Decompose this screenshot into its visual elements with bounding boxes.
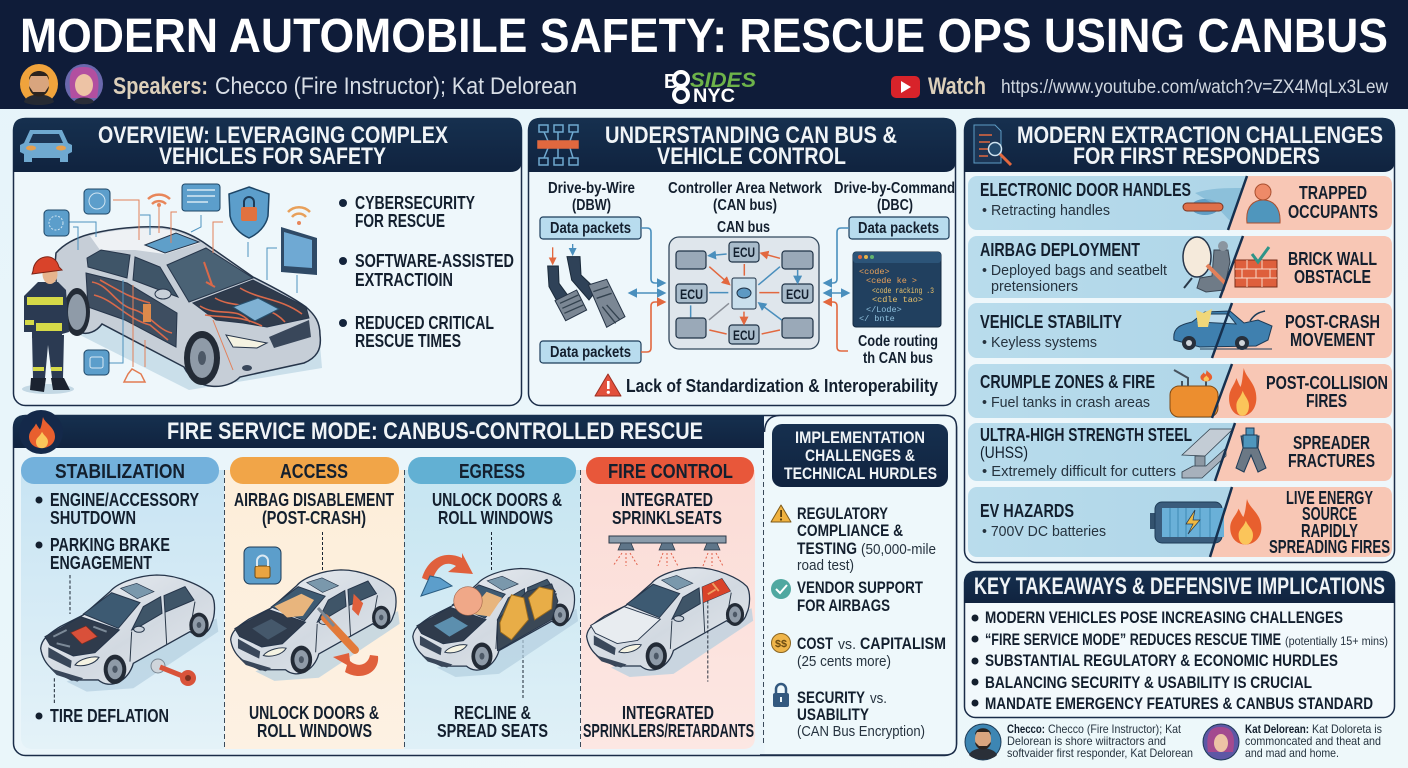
row: EV hazards (968, 487, 1392, 557)
callout: standardization: Lack of Standardization & Interoperability (626, 376, 938, 396)
column: access: AIRBAG DISABLEMENT (234, 490, 394, 510)
column: stabilization (21, 457, 224, 749)
icon: tire deflation wrench (151, 659, 196, 686)
data packets boxes: Data packets (550, 220, 631, 237)
panel: implementation challenges (760, 416, 956, 755)
row: EV hazards: RAPIDLY (1301, 521, 1358, 541)
icon: coin (772, 634, 790, 652)
speaker bio: Checco: Delorean is shore wiitractors and (1007, 734, 1166, 748)
row: airbag deployment: BRICK WALL (1288, 249, 1377, 269)
connector arrows (630, 228, 849, 352)
item: security (797, 688, 925, 740)
icon: warning triangle (595, 374, 621, 396)
item: vendor support: VENDOR SUPPORT (797, 578, 923, 597)
icon: fuel tank (1170, 370, 1218, 417)
icon: spreader tool (1236, 428, 1266, 472)
row: EV hazards: EV HAZARDS (980, 501, 1074, 521)
code window: </ bnte (859, 314, 895, 324)
item: cost: CAPITALISM (860, 634, 946, 653)
icon: warning (771, 505, 791, 522)
column: egress: RECLINE & (454, 703, 531, 723)
item: security: SECURITY (797, 688, 866, 707)
illustration: connected car (55, 227, 322, 390)
row: airbag deployment: pretensioners (991, 278, 1078, 295)
speakers line: Checco (Fire Instructor); Kat Delorean (215, 73, 577, 100)
speaker bio: Kat: commoncated and theat and (1245, 734, 1381, 748)
row: EV hazards: LIVE ENERGY (1286, 488, 1373, 508)
speaker bio: Kat: and mad and home. (1245, 746, 1339, 760)
dashed dividers (224, 450, 764, 748)
icon: flame badge (19, 410, 63, 454)
item: regulatory compliance: REGULATORY (797, 504, 889, 523)
column: fire control: FIRE CONTROL (608, 461, 733, 483)
column: access: UNLOCK DOORS & (249, 703, 379, 723)
icon: fire (1229, 368, 1256, 416)
icon: door handle (1183, 188, 1243, 222)
item: cost: vs. (838, 636, 856, 653)
bullets: overview points: SOFTWARE-ASSISTED (355, 251, 514, 271)
icon: steel beam (1182, 429, 1233, 478)
icon: pry tool and arrow (318, 608, 378, 676)
item: vendor support (797, 578, 923, 615)
icon: battery (1150, 502, 1224, 543)
row: ultra-high strength steel: (UHSS) (980, 443, 1028, 462)
row: electronic door handles: OCCUPANTS (1288, 202, 1378, 222)
column titles: (CAN bus) (713, 197, 777, 214)
panel: extraction challenges (964, 118, 1395, 562)
heading: implementation (784, 428, 937, 483)
heading: CAN bus: VEHICLE CONTROL (657, 143, 846, 170)
icon: fire (1230, 499, 1261, 545)
bullets: takeaways: BALANCING SECURITY & USABILITY IS CRUCIAL (985, 673, 1312, 692)
illustration: car with engine bay (41, 575, 218, 703)
column: stabilization: ENGINE/ACCESSORY (50, 490, 199, 510)
bullets: takeaways: “FIRE SERVICE MODE” REDUCES RESCUE TIME (985, 630, 1281, 649)
column: stabilization: ENGAGEMENT (50, 553, 152, 573)
CAN bus network diagram (669, 237, 819, 349)
bullets: takeaways (972, 608, 1388, 713)
column: access (225, 457, 404, 749)
row: electronic door handles (968, 176, 1392, 230)
column: fire control: INTEGRATED (621, 490, 713, 510)
CAN bus network diagram: ECU (786, 286, 809, 302)
column: fire control (581, 457, 755, 749)
column titles: Drive-by-Command (834, 180, 955, 197)
panel: CAN bus (528, 118, 956, 406)
item: cost: (25 cents more) (797, 653, 891, 670)
bullets: overview points: RESCUE TIMES (355, 331, 461, 351)
column: stabilization: TIRE DEFLATION (50, 706, 169, 726)
column titles: (DBC) (877, 197, 913, 214)
icon: car front (20, 130, 72, 162)
row: vehicle stability: POST-CRASH (1285, 312, 1380, 332)
row: ultra-high strength steel: FRACTURES (1288, 451, 1375, 471)
column: egress: EGRESS (459, 461, 525, 483)
heading: implementation: TECHNICAL HURDLES (784, 464, 937, 483)
icon: lock (773, 684, 789, 707)
column: fire control: INTEGRATED (622, 703, 714, 723)
watch label: Watch (928, 73, 986, 100)
bullets: overview points: EXTRACTIOIN (355, 270, 453, 290)
speakers line: Speakers: (113, 73, 208, 100)
speaker bio: Kat (1203, 722, 1382, 760)
code routing caption: Code routing (858, 333, 938, 350)
bullets: overview points: REDUCED CRITICAL (355, 313, 494, 333)
icon: crashed car (1174, 309, 1272, 350)
column titles: CAN bus (717, 219, 770, 236)
item: regulatory compliance: COMPLIANCE & (797, 521, 903, 540)
item: regulatory compliance: (50,000-mile (861, 541, 936, 558)
column: egress: ROLL WINDOWS (438, 508, 553, 528)
speaker bio: Checco (965, 722, 1193, 760)
row: electronic door handles: TRAPPED (1299, 183, 1367, 203)
item: security: vs. (870, 690, 887, 707)
item: security: USABILITY (797, 705, 870, 724)
column: access: ROLL WINDOWS (257, 721, 372, 741)
speaker avatar: Checco (20, 64, 58, 105)
heading: extraction: FOR FIRST RESPONDERS (1073, 143, 1320, 170)
logo: BSides NYC (664, 69, 756, 107)
item: cost: COST (797, 634, 833, 653)
speaker avatar: Kat (65, 64, 103, 104)
row: vehicle stability: MOVEMENT (1290, 330, 1375, 350)
heading: overview: VEHICLES FOR SAFETY (159, 143, 386, 170)
code window: <code> (859, 267, 890, 277)
logo: BSides NYC: B (664, 71, 678, 93)
column: stabilization: SHUTDOWN (50, 508, 136, 528)
column titles (548, 180, 955, 236)
icon group: connected systems (44, 184, 317, 382)
item: regulatory compliance: road test) (797, 557, 854, 574)
row: ultra-high strength steel: SPREADER (1293, 433, 1370, 453)
item: security: (CAN Bus Encryption) (797, 723, 925, 740)
panel: overview (13, 118, 522, 406)
code routing caption (858, 333, 938, 367)
row: crumple zones and fire: • Fuel tanks in crash areas (982, 394, 1150, 411)
panel: key takeaways (964, 571, 1395, 718)
row: airbag deployment: OBSTACLE (1294, 267, 1371, 287)
illustration: firefighter (22, 257, 74, 394)
icon: check (771, 579, 791, 599)
bullets: overview points (339, 193, 514, 351)
row: vehicle stability (968, 303, 1392, 358)
data packets boxes (540, 217, 949, 363)
column: fire control: SPRINKLSEATS (612, 508, 722, 528)
row: airbag deployment: • Deployed bags and seatbelt (982, 262, 1168, 279)
row: electronic door handles: • Retracting handles (982, 202, 1110, 219)
icon: checklist magnifier (974, 125, 1011, 165)
data packets boxes: Data packets (858, 220, 939, 237)
bullets: overview points: CYBERSECURITY (355, 193, 475, 213)
item: regulatory compliance: TESTING (797, 539, 857, 558)
logo: BSides NYC: NYC (693, 86, 735, 107)
column: egress: UNLOCK DOORS & (432, 490, 562, 510)
heading: overview (98, 122, 448, 170)
illustration: car with airbag (231, 570, 400, 681)
item: cost (797, 634, 946, 670)
item: vendor support: FOR AIRBAGS (797, 596, 890, 615)
row: electronic door handles: ELECTRONIC DOOR HANDLES (980, 180, 1191, 200)
column: stabilization: STABILIZATION (55, 461, 185, 483)
column: fire control: SPRINKLERS/RETARDANTS (583, 721, 754, 741)
CAN bus network diagram: ECU (680, 286, 703, 302)
code routing caption: th CAN bus (863, 350, 933, 367)
item: regulatory compliance (797, 504, 936, 574)
logo: BSides NYC: SIDES (690, 69, 756, 92)
speaker bio: Kat: Kat Doloreta is (1312, 722, 1382, 736)
column: access: (POST-CRASH) (262, 508, 366, 528)
row: vehicle stability: • Keyless systems (982, 334, 1097, 351)
bullets: takeaways: (potentially 15+ mins) (1285, 634, 1388, 648)
bullets: overview points: FOR RESCUE (355, 211, 445, 231)
column titles: Controller Area Network (668, 180, 822, 197)
row: airbag deployment: AIRBAG DEPLOYMENT (980, 240, 1140, 260)
row: crumple zones and fire: CRUMPLE ZONES & FIRE (980, 372, 1155, 392)
speaker bio: Checco: Checco (Fire Instructor); Kat (1048, 722, 1182, 736)
icon: coin: $$ (775, 639, 787, 650)
row: ultra-high strength steel: ULTRA-HIGH STRENGTH STEEL (980, 425, 1192, 445)
icon: pedals (548, 244, 625, 327)
CAN bus network diagram: ECU (733, 244, 755, 260)
icon: curved arrow (421, 553, 473, 596)
code window: <cdle tao> (872, 295, 923, 305)
column titles: Drive-by-Wire (548, 180, 635, 197)
heading: CAN bus (605, 122, 897, 170)
row: ultra-high strength steel: • Extremely difficult for cutters (982, 463, 1176, 480)
heading: CAN bus: UNDERSTANDING CAN BUS & (605, 122, 897, 149)
speaker bio: Checco: Checco: (1007, 722, 1045, 736)
code window: </Lode> (866, 305, 902, 315)
icon: trapped person (1247, 184, 1280, 223)
column titles: (DBW) (572, 197, 611, 214)
heading: fire service mode: FIRE SERVICE MODE: CANBUS-CONTROLLED RESCUE (167, 418, 703, 445)
row: EV hazards: • 700V DC batteries (982, 523, 1106, 540)
speaker bio: Checco: softvaider first responder, Kat Delorean (1007, 746, 1193, 760)
CAN bus network diagram: ECU (733, 327, 755, 343)
code window (853, 252, 941, 327)
header banner (0, 0, 1408, 109)
illustration: car with interior fire (587, 568, 753, 682)
column: egress: SPREAD SEATS (437, 721, 548, 741)
heading: implementation: CHALLENGES & (805, 446, 915, 465)
icon: padlock (244, 547, 281, 584)
data packets boxes: Data packets (550, 344, 631, 361)
row: ultra-high strength steel (968, 423, 1392, 481)
row: EV hazards: SOURCE (1302, 504, 1357, 524)
heading: overview: OVERVIEW: LEVERAGING COMPLEX (98, 122, 448, 149)
code window: <code racking .3 (872, 286, 934, 296)
icon: airbag and seat (1183, 237, 1230, 292)
row: airbag deployment (968, 236, 1392, 298)
speaker bio: Kat: Kat Delorean: (1245, 722, 1309, 736)
illustration: car with seats (413, 568, 578, 677)
column: stabilization: PARKING BRAKE (50, 535, 170, 555)
column: egress (404, 457, 580, 749)
row: vehicle stability: VEHICLE STABILITY (980, 312, 1122, 332)
code window: <cede ke > (866, 276, 917, 286)
icon: sprinkler bar (609, 536, 726, 566)
heading: implementation: IMPLEMENTATION (795, 428, 925, 447)
column: access: ACCESS (280, 461, 348, 483)
row: crumple zones and fire: FIRES (1306, 391, 1347, 411)
heading: extraction (1017, 122, 1383, 170)
icon: brick wall (1235, 247, 1277, 287)
icon: YouTube play (891, 76, 920, 98)
icon: network bus (538, 125, 578, 165)
row: crumple zones and fire (968, 364, 1392, 418)
panel: fire service mode (13, 410, 956, 756)
